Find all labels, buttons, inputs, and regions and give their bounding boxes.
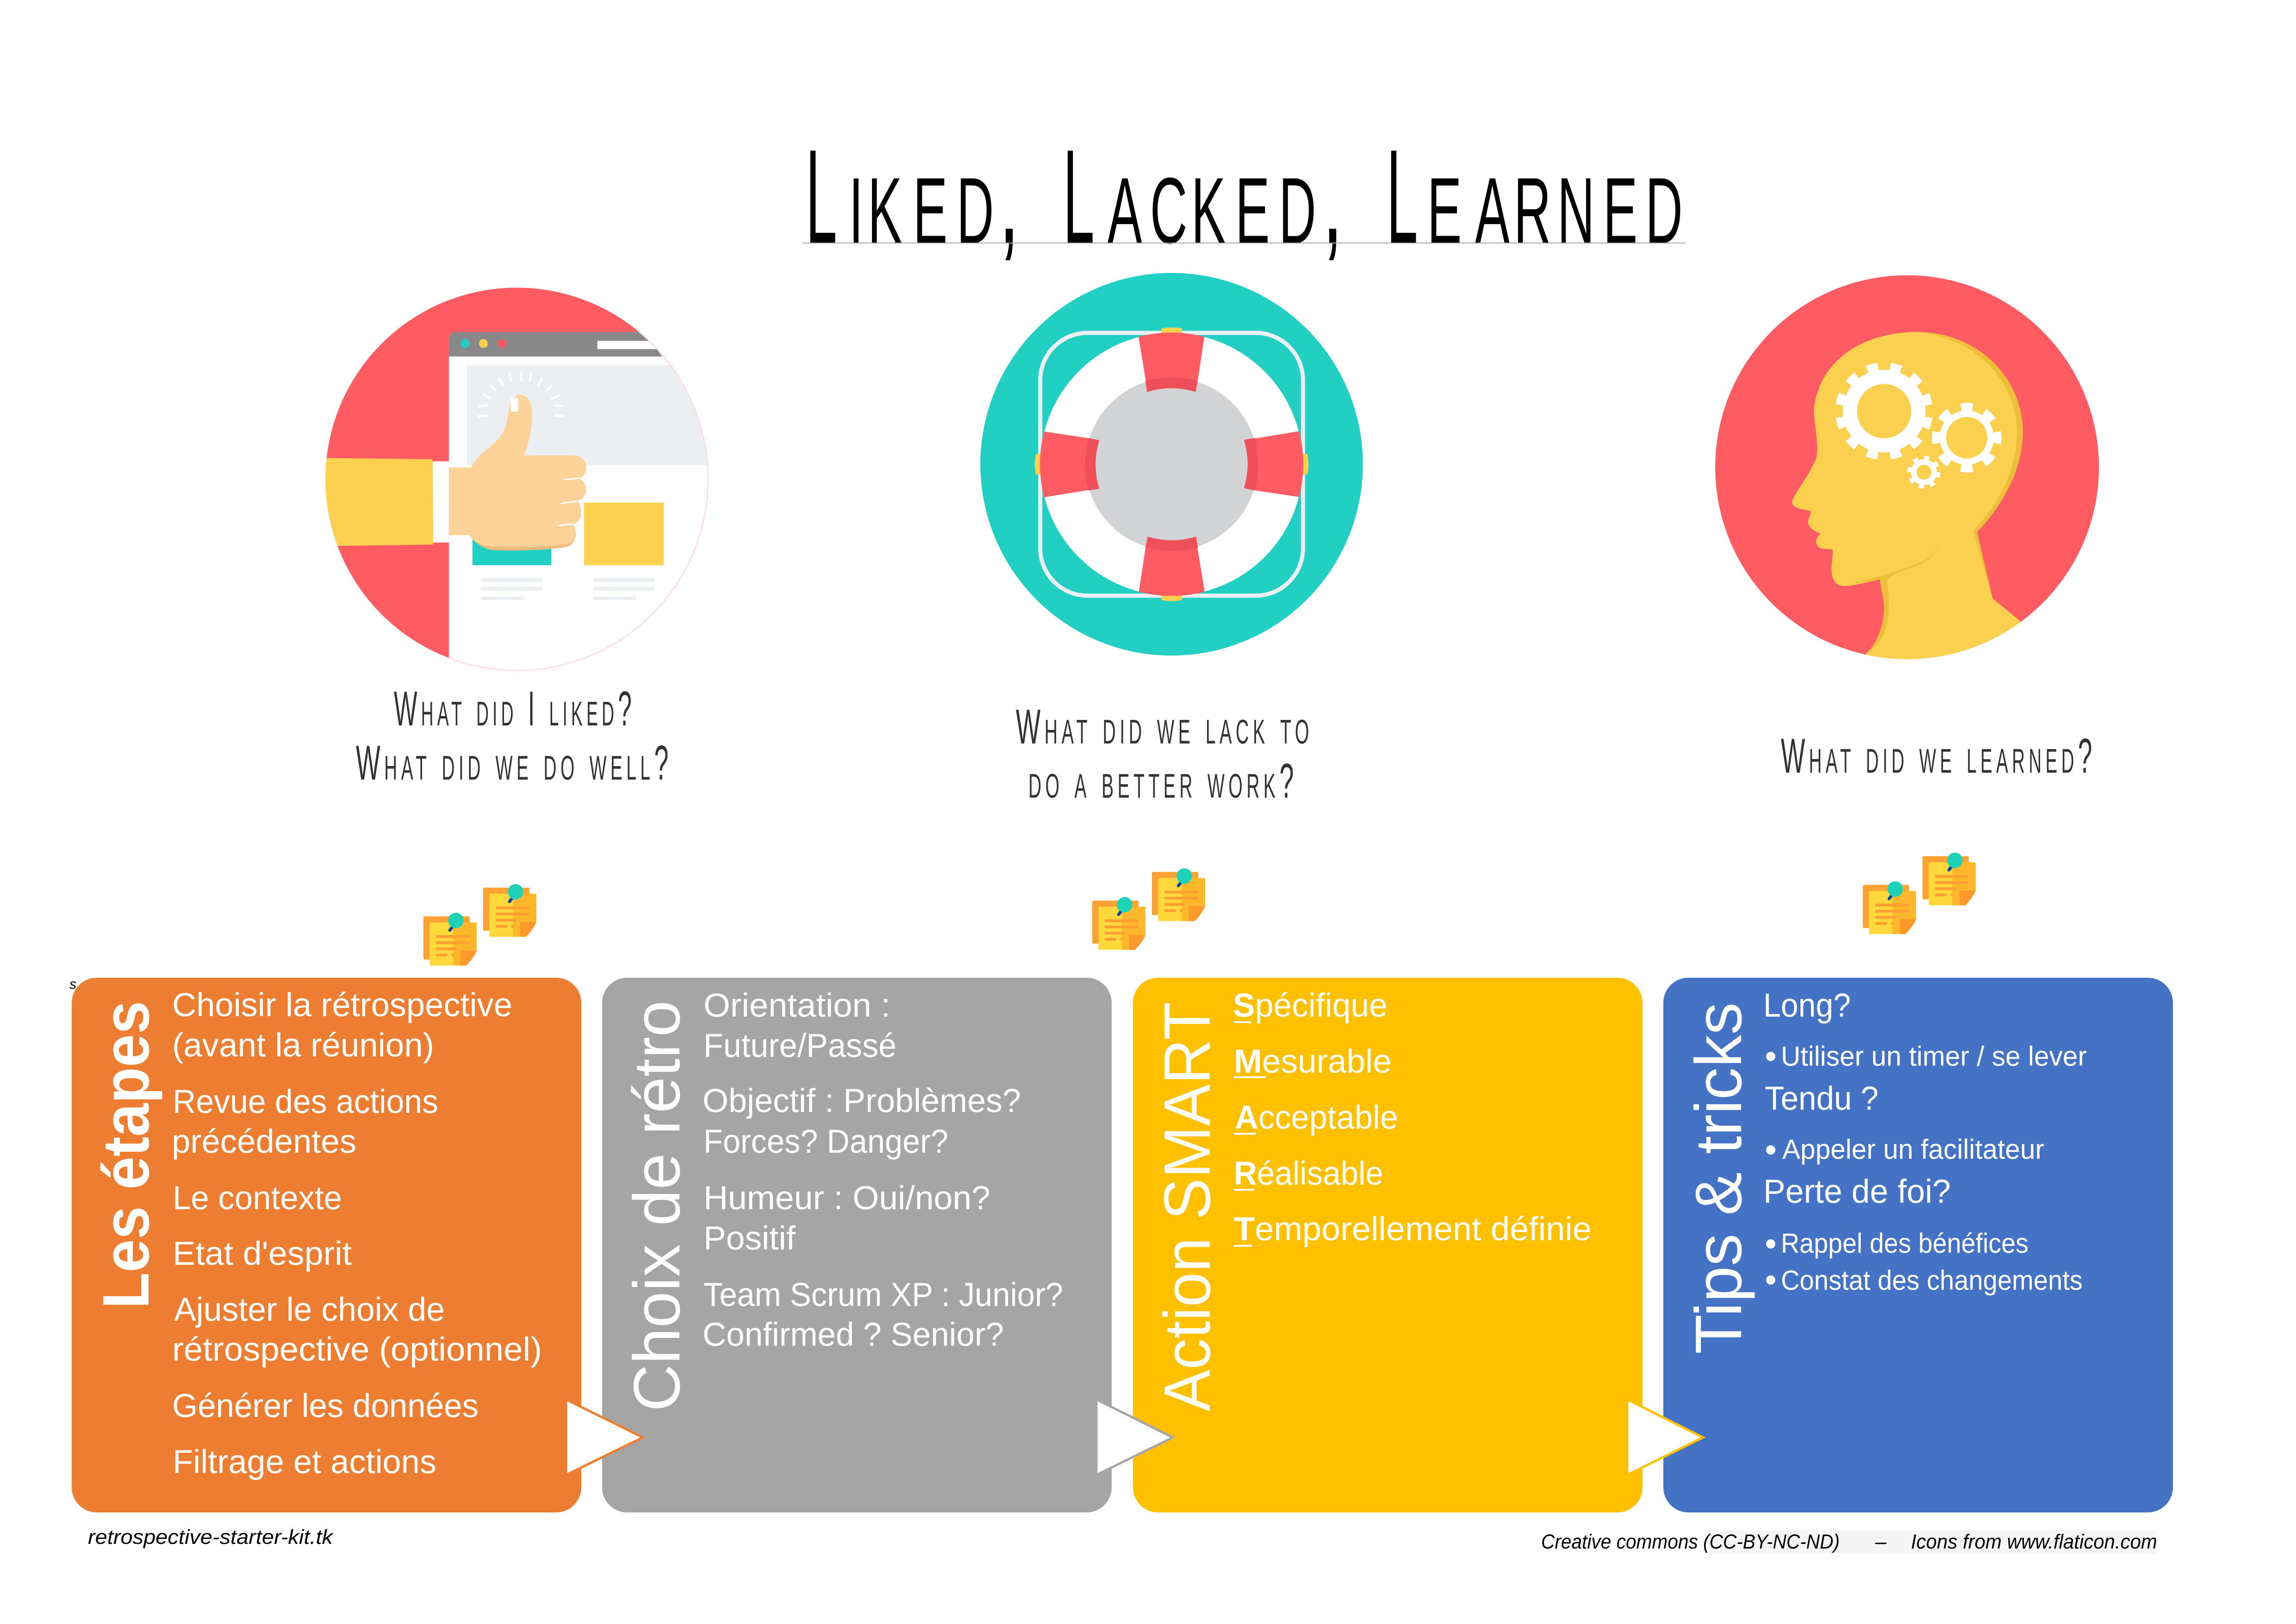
list: steps: Etat d'esprit [173, 1235, 352, 1272]
list: smart criteria: Réalisable [1234, 1155, 1383, 1192]
list: smart criteria: Acceptable [1235, 1099, 1398, 1136]
list: tips: Rappel des bénéfices [1781, 1228, 2028, 1259]
title: L [1063, 122, 1095, 272]
panel: action smart [1133, 978, 1643, 1512]
heading: choix de rétro: Choix de rétro [620, 1000, 694, 1412]
list: steps: rétrospective (optionnel) [172, 1331, 542, 1368]
list: retro choice criteria: Humeur : Oui/non? [703, 1180, 990, 1217]
list: tips: Constat des changements [1781, 1265, 2083, 1296]
list: retro choice criteria: Orientation : [703, 987, 890, 1024]
panel: les étapes [72, 978, 581, 1512]
list: tips: Long? [1763, 987, 1851, 1024]
list: smart criteria: Spécifique [1233, 987, 1388, 1024]
question: what did I like: What did I liked? [394, 681, 635, 736]
list: tips: Perte de foi? [1763, 1173, 1951, 1210]
footer: credits [1541, 1530, 2157, 1553]
list: steps: (avant la réunion) [172, 1027, 434, 1064]
list: steps: Générer les données [172, 1387, 479, 1424]
footer: credits: – [1875, 1530, 1887, 1553]
heading: action smart: Action SMART [1151, 1002, 1224, 1412]
arrow: gray to yellow [1096, 1399, 1173, 1475]
footer: credits: Creative commons (CC-BY-NC-ND) [1541, 1530, 1840, 1553]
panel: choix de rétro [602, 978, 1112, 1512]
footer: website: retrospective-starter-kit.tk [88, 1526, 334, 1549]
list: retro choice criteria: Objectif : Problèmes? [703, 1082, 1021, 1119]
list: retro choice criteria [703, 987, 1063, 1353]
question: what did I like [356, 681, 672, 790]
list: steps: Filtrage et actions [173, 1443, 436, 1480]
question: what did we lack: What did we lack to [1016, 700, 1313, 754]
icon: lifebuoy [980, 273, 1363, 656]
list: tips: Appeler un facilitateur [1782, 1134, 2044, 1165]
icon: head with gears [1715, 275, 2099, 674]
question: what did we lack [1016, 700, 1313, 808]
arrow: orange to gray [566, 1399, 643, 1475]
stray mark: s [69, 977, 76, 992]
heading: les étapes: Les étapes [89, 1001, 163, 1309]
title: earned [1427, 122, 1683, 272]
list: retro choice criteria: Positif [703, 1220, 796, 1257]
question: what did I like: What did we do well? [356, 736, 672, 790]
list: steps: Revue des actions [173, 1083, 438, 1120]
icon: sticky notes lacked [1092, 868, 1205, 950]
icon: sticky notes liked [423, 884, 536, 966]
list: smart criteria [1233, 987, 1592, 1248]
list: steps [172, 987, 542, 1480]
icon: sticky notes learned [1863, 853, 1976, 935]
title: L [806, 122, 837, 272]
heading: tips & tricks: Tips & tricks [1682, 1002, 1755, 1354]
list: tips: Tendu ? [1765, 1080, 1879, 1117]
list: retro choice criteria: Team Scrum XP : Junior? [703, 1276, 1063, 1313]
title: L [1387, 122, 1418, 272]
list: steps: Le contexte [173, 1180, 342, 1217]
list: steps: Choisir la rétrospective [172, 987, 512, 1024]
list: tips [1763, 987, 2087, 1296]
icon: thumbs up on web page [307, 284, 721, 674]
title: iked, [849, 122, 1020, 272]
list: steps: Ajuster le choix de [174, 1291, 445, 1328]
list: smart criteria: Mesurable [1234, 1043, 1392, 1080]
panel: tips & tricks [1663, 978, 2173, 1512]
list: steps: précédentes [172, 1123, 356, 1160]
arrow: yellow to blue [1627, 1399, 1703, 1475]
question: what did we lack: do a better work? [1028, 754, 1298, 808]
title [803, 122, 1686, 272]
title: acked, [1108, 122, 1343, 272]
footer: credits: Icons from www.flaticon.com [1911, 1530, 2157, 1553]
list: retro choice criteria: Forces? Danger? [703, 1123, 948, 1160]
list: retro choice criteria: Future/Passé [703, 1027, 896, 1064]
list: tips: Utiliser un timer / se lever [1781, 1041, 2087, 1072]
list: smart criteria: Temporellement définie [1234, 1211, 1592, 1248]
list: retro choice criteria: Confirmed ? Senior? [703, 1316, 1004, 1353]
